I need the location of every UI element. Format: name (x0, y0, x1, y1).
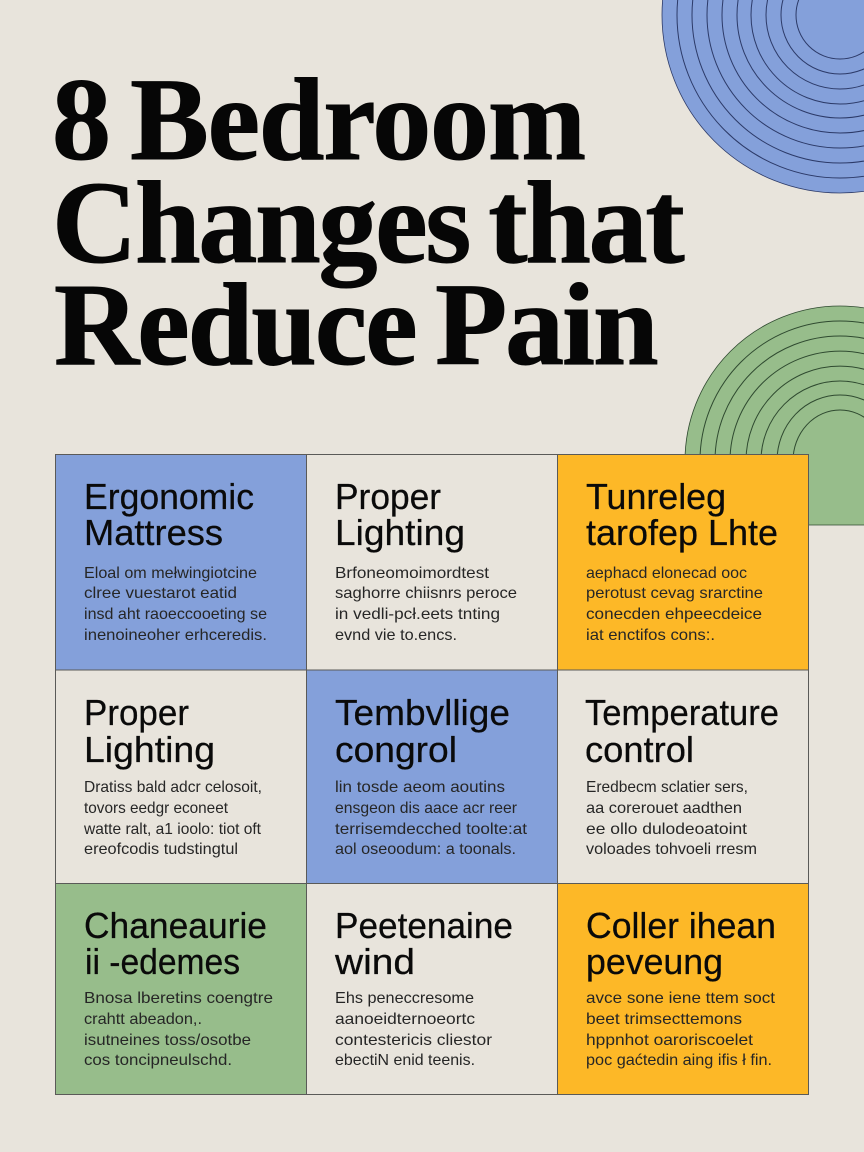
panel: Temperature control (558, 670, 808, 884)
panel: Ergonomic Mattress (56, 455, 306, 670)
panel: Ergonomic Mattress: clree vuestarot eatid (84, 585, 237, 602)
panel: Tembvllige congrol: congrol (335, 729, 457, 770)
panel: Peetenaine wind: contestericis cliestor (335, 1032, 493, 1049)
panel: Proper Lighting (top): saghorre chiisnrs peroce (335, 585, 517, 602)
panel: Proper Lighting (middle): Proper (84, 692, 189, 733)
panel: Tunreleg tarofep Lhte: tarofep Lhte (586, 512, 778, 553)
panel: Ergonomic Mattress: Ergonomic (84, 476, 254, 517)
panel: Proper Lighting (top): in vedli-pcł.eets tnting (335, 606, 500, 623)
panel: Peetenaine wind: wind (334, 941, 415, 982)
panel: Tembvllige congrol: Tembvllige (335, 692, 510, 733)
panel: Coller ihean peveung: beet trimsecttemons (586, 1011, 742, 1028)
panel: Coller ihean peveung: Coller ihean (586, 905, 776, 946)
panel: Tunreleg tarofep Lhte: conecden ehpeecdeice (586, 606, 762, 623)
panel: Chaneaurie ii edemes: Chaneaurie (84, 905, 267, 946)
panel: Tunreleg tarofep Lhte (558, 455, 808, 670)
panel: Coller ihean peveung: poc gaćtedin aing ifis ł fin. (586, 1052, 772, 1069)
panel: Ergonomic Mattress: Eloal om mełwingiotcine (84, 565, 257, 582)
panel: Peetenaine wind: ebectiN enid teenis. (335, 1052, 475, 1069)
panel: Proper Lighting (top): Proper (335, 476, 441, 517)
panel: Tembvllige congrol: ensgeon dis aace acr reer (335, 800, 518, 817)
title: 8 Bedroom (52, 54, 585, 185)
panel: Temperature control: Temperature (585, 692, 779, 733)
panel: Proper Lighting (top) (306, 455, 558, 670)
panel: Proper Lighting (middle) (56, 670, 306, 884)
panel: Temperature control: control (585, 729, 694, 770)
panel: Proper Lighting (middle): Dratiss bald adcr celosoit, (84, 779, 262, 796)
panel: Proper Lighting (middle): tovors eedgr econeet (84, 800, 229, 817)
title: Reduce Pain (54, 259, 657, 390)
panel: Proper Lighting (middle): ereofcodis tudstingtul (84, 841, 238, 858)
panel: Tunreleg tarofep Lhte: iat enctifos cons:. (586, 627, 715, 644)
panel: Tembvllige congrol (306, 670, 558, 884)
panel: Tembvllige congrol: lin tosde aeom aoutins (335, 779, 505, 796)
panel: Peetenaine wind: Ehs peneccresome (335, 990, 474, 1007)
panel: Ergonomic Mattress: inenoineoher erhceredis. (84, 627, 267, 644)
panel: grid of eight cards (56, 454, 808, 1094)
panel: Chaneaurie ii edemes: Bnosa lberetins coengtre (84, 990, 273, 1007)
panel: Coller ihean peveung: hppnhot oaroriscoelet (586, 1032, 754, 1049)
panel: Peetenaine wind: Peetenaine (335, 905, 513, 946)
panel: Ergonomic Mattress: insd aht raoeccooeting se (84, 606, 267, 623)
title (52, 54, 685, 390)
panel: Coller ihean peveung: peveung (586, 941, 723, 982)
panel: Tunreleg tarofep Lhte: aephacd elonecad ooc (586, 565, 747, 582)
icon: green concentric arches (685, 306, 864, 525)
panel: Temperature control: aa corerouet aadthen (586, 800, 742, 817)
panel: Coller ihean peveung (558, 884, 808, 1094)
panel: Chaneaurie ii edemes: crahtt abeadon,. (84, 1011, 202, 1028)
panel: Chaneaurie ii edemes: isutneines toss/osotbe (84, 1032, 251, 1049)
panel: Peetenaine wind: aanoeidternoeortc (335, 1011, 475, 1028)
panel: Proper Lighting (top): Brfoneomoimordtest (335, 565, 490, 582)
panel: Tembvllige congrol: aol oseoodum: a toonals. (335, 841, 516, 858)
panel: Tunreleg tarofep Lhte: perotust cevag srarctine (586, 585, 763, 602)
panel: Tembvllige congrol: terrisemdecched toolte:at (335, 821, 528, 838)
panel: Ergonomic Mattress: Mattress (84, 512, 223, 553)
panel: Temperature control: Eredbecm sclatier sers, (586, 779, 748, 796)
panel: Chaneaurie ii edemes: ii -edemes (85, 941, 240, 982)
panel: Chaneaurie ii edemes (56, 884, 306, 1094)
panel: Tunreleg tarofep Lhte: Tunreleg (586, 476, 726, 517)
panel: Proper Lighting (middle): watte ralt, a1 ioolo: tiot oft (83, 821, 262, 838)
panel: Coller ihean peveung: avce sone iene ttem soct (586, 990, 776, 1007)
panel: Temperature control: ee ollo dulodeoatoint (586, 821, 748, 838)
panel: Chaneaurie ii edemes: cos toncipneulschd. (84, 1052, 232, 1069)
icon: blue concentric circles (662, 0, 864, 193)
panel: Peetenaine wind (306, 884, 558, 1094)
title: Changes that (52, 156, 682, 288)
panel: Proper Lighting (top): Lighting (335, 512, 465, 553)
panel: Proper Lighting (top): evnd vie to.encs. (335, 627, 457, 644)
panel: Temperature control: voloades tohvoeli rresm (586, 841, 757, 858)
panel: Proper Lighting (middle): Lighting (84, 729, 215, 770)
